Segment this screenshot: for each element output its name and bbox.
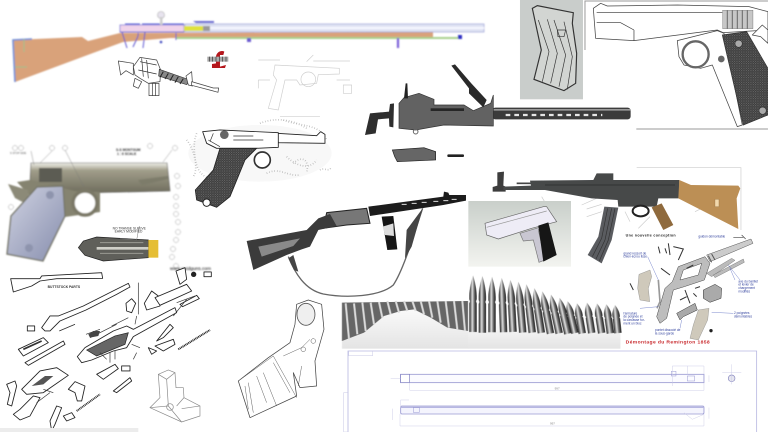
receiver — [503, 173, 679, 207]
backdrop — [342, 300, 468, 349]
right grip — [690, 308, 709, 340]
panel: Remington 1858 disassembly: de poignée et — [623, 315, 643, 319]
panel: colour pistol schematic: 1 : 6 SCALE — [117, 152, 137, 156]
receiver — [323, 208, 370, 228]
panel: Remington 1858 disassembly: pontet dissocié de — [655, 328, 681, 332]
sling — [288, 208, 423, 296]
butt plate — [13, 39, 32, 82]
grip — [652, 203, 673, 230]
grip — [195, 148, 257, 207]
panel: Remington 1858 disassembly: axe du barillet — [738, 279, 758, 283]
operating rod — [42, 283, 130, 331]
panel: barrel engineering drawing: 997 — [555, 386, 560, 390]
stock — [247, 214, 337, 270]
left belt — [342, 301, 468, 341]
section detail of pistol barrel: EARLY MODIFIED — [115, 230, 143, 234]
rifle stock — [13, 32, 433, 82]
grip — [722, 32, 768, 125]
panel: Remington 1858 disassembly: et levier de — [738, 283, 754, 287]
panel: ammunition belt photo — [342, 275, 622, 349]
detached part — [392, 148, 436, 162]
pistol grip — [365, 103, 394, 135]
Luger pistol — [187, 120, 332, 207]
main receiver — [77, 308, 177, 363]
bolt and action — [120, 12, 398, 48]
machine gun — [365, 64, 631, 162]
panel: Remington 1858 disassembly: ment un bloc — [623, 321, 642, 325]
section detail of pistol barrel: NO TRANSE SLEEVE — [113, 226, 147, 230]
slide — [30, 163, 170, 193]
rifle barrel — [185, 24, 484, 32]
callout balloons — [8, 144, 180, 268]
panel: Remington 1858 disassembly — [623, 234, 758, 345]
panel: barrel engineering drawing — [344, 351, 757, 432]
icon: red logo — [207, 51, 228, 68]
muzzle view — [728, 375, 735, 382]
panel: Remington 1858 disassembly: chien-écrou lisse — [623, 255, 647, 259]
frame — [677, 31, 742, 127]
icon: carbine line drawing — [118, 57, 219, 96]
cartridges — [469, 275, 622, 335]
receiver — [399, 93, 493, 130]
spring — [178, 330, 210, 349]
frame and trigger guard — [17, 180, 100, 218]
serrations — [723, 10, 753, 29]
upper tube — [401, 374, 704, 383]
feed cover — [451, 64, 487, 107]
panel: exploded rifle parts diagram — [0, 268, 211, 432]
panel: Remington 1858 disassembly: démontables — [734, 314, 752, 318]
trigger housing — [22, 368, 68, 394]
panel: Remington 1858 disassembly: la sous-garde — [655, 331, 674, 335]
panel: Remington 1858 disassembly: modifiés — [738, 289, 750, 293]
panel: Remington 1858 disassembly: l'armature — [623, 311, 638, 315]
grip — [538, 222, 557, 262]
barrel — [277, 132, 325, 143]
slide — [485, 207, 557, 239]
small parts — [630, 243, 700, 303]
panel: silver pistol photo — [468, 201, 571, 267]
stock — [678, 180, 740, 229]
notes: S-S MONTGUM — [116, 148, 141, 152]
lower receiver drawing — [238, 300, 324, 418]
lower tube — [401, 406, 704, 414]
section detail of pistol barrel — [78, 226, 158, 261]
slide — [593, 3, 768, 41]
ejector rods — [707, 258, 735, 277]
blue leader lines — [640, 257, 740, 328]
left grip — [638, 270, 652, 302]
panel: Remington 1858 disassembly: la carcasse for- — [623, 318, 645, 322]
magazine — [382, 216, 397, 250]
barrel — [707, 239, 753, 262]
panel: Remington 1858 disassembly: grand ressort de — [623, 252, 647, 256]
rear sight parts — [126, 299, 136, 313]
cleaning rod — [176, 37, 460, 39]
grip panel — [7, 186, 65, 261]
receiver — [203, 130, 278, 148]
frame — [348, 351, 757, 432]
barrel shroud — [368, 192, 466, 216]
submachine gun with sling — [247, 192, 466, 296]
assault rifle with tan stock — [493, 168, 741, 263]
heading: Une nouvelle conception — [626, 234, 676, 238]
website label: www.guidguns.com — [170, 266, 211, 271]
panel: Remington 1858 disassembly: chargement — [738, 286, 755, 290]
trigger guard — [633, 206, 649, 216]
frame — [657, 257, 710, 323]
magazine — [588, 207, 618, 263]
pin — [447, 154, 464, 157]
panel: long rifle cross-section — [13, 12, 484, 82]
stock outline — [11, 273, 103, 292]
rear sight — [404, 83, 408, 98]
panel: curved magazine photo — [520, 0, 583, 99]
cylinder — [703, 284, 722, 302]
mainspring — [657, 280, 660, 308]
panel: large pistol line drawing — [585, 1, 768, 129]
faint pistol blueprint — [258, 55, 352, 117]
icon: machined block — [150, 370, 200, 422]
trigger guard — [677, 303, 697, 320]
barrel jacket — [492, 108, 631, 119]
panel: colour pistol schematic: S STOP SIDE — [10, 151, 26, 155]
panel: exploded rifle parts diagram: BUTTSTOCK PARTS — [48, 285, 81, 289]
caption: Démontage du Remington 1858 — [626, 339, 710, 345]
front sight — [493, 172, 506, 192]
speckled background — [187, 120, 332, 182]
bottom page edge — [0, 428, 138, 432]
panel: colour pistol schematic — [7, 144, 180, 268]
panel: Remington 1858 disassembly: 2 poignées — [734, 311, 750, 315]
frame — [520, 227, 545, 262]
blue notes: guidon démontable — [698, 235, 725, 239]
panel: barrel engineering drawing: 997 — [550, 422, 555, 426]
trigger guard — [683, 41, 709, 67]
trigger guard — [254, 152, 270, 168]
